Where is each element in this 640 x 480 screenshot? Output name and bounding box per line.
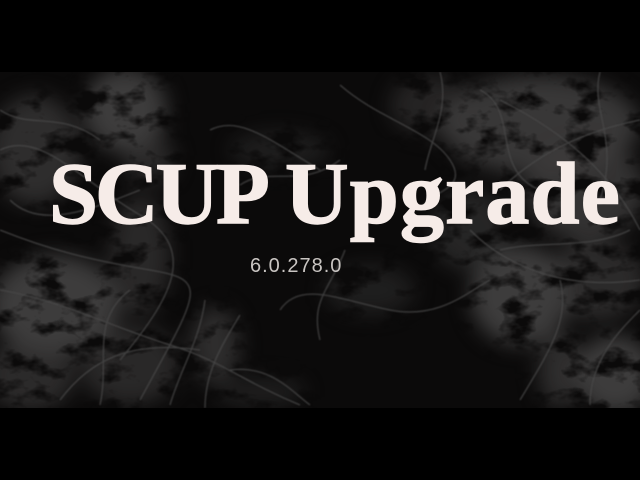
version number: 6.0.278.0 — [250, 255, 342, 277]
title — [49, 146, 621, 244]
title: Upgrade — [285, 146, 621, 243]
background panel: dark smoke texture — [0, 72, 640, 408]
title: SCUP — [49, 146, 267, 243]
